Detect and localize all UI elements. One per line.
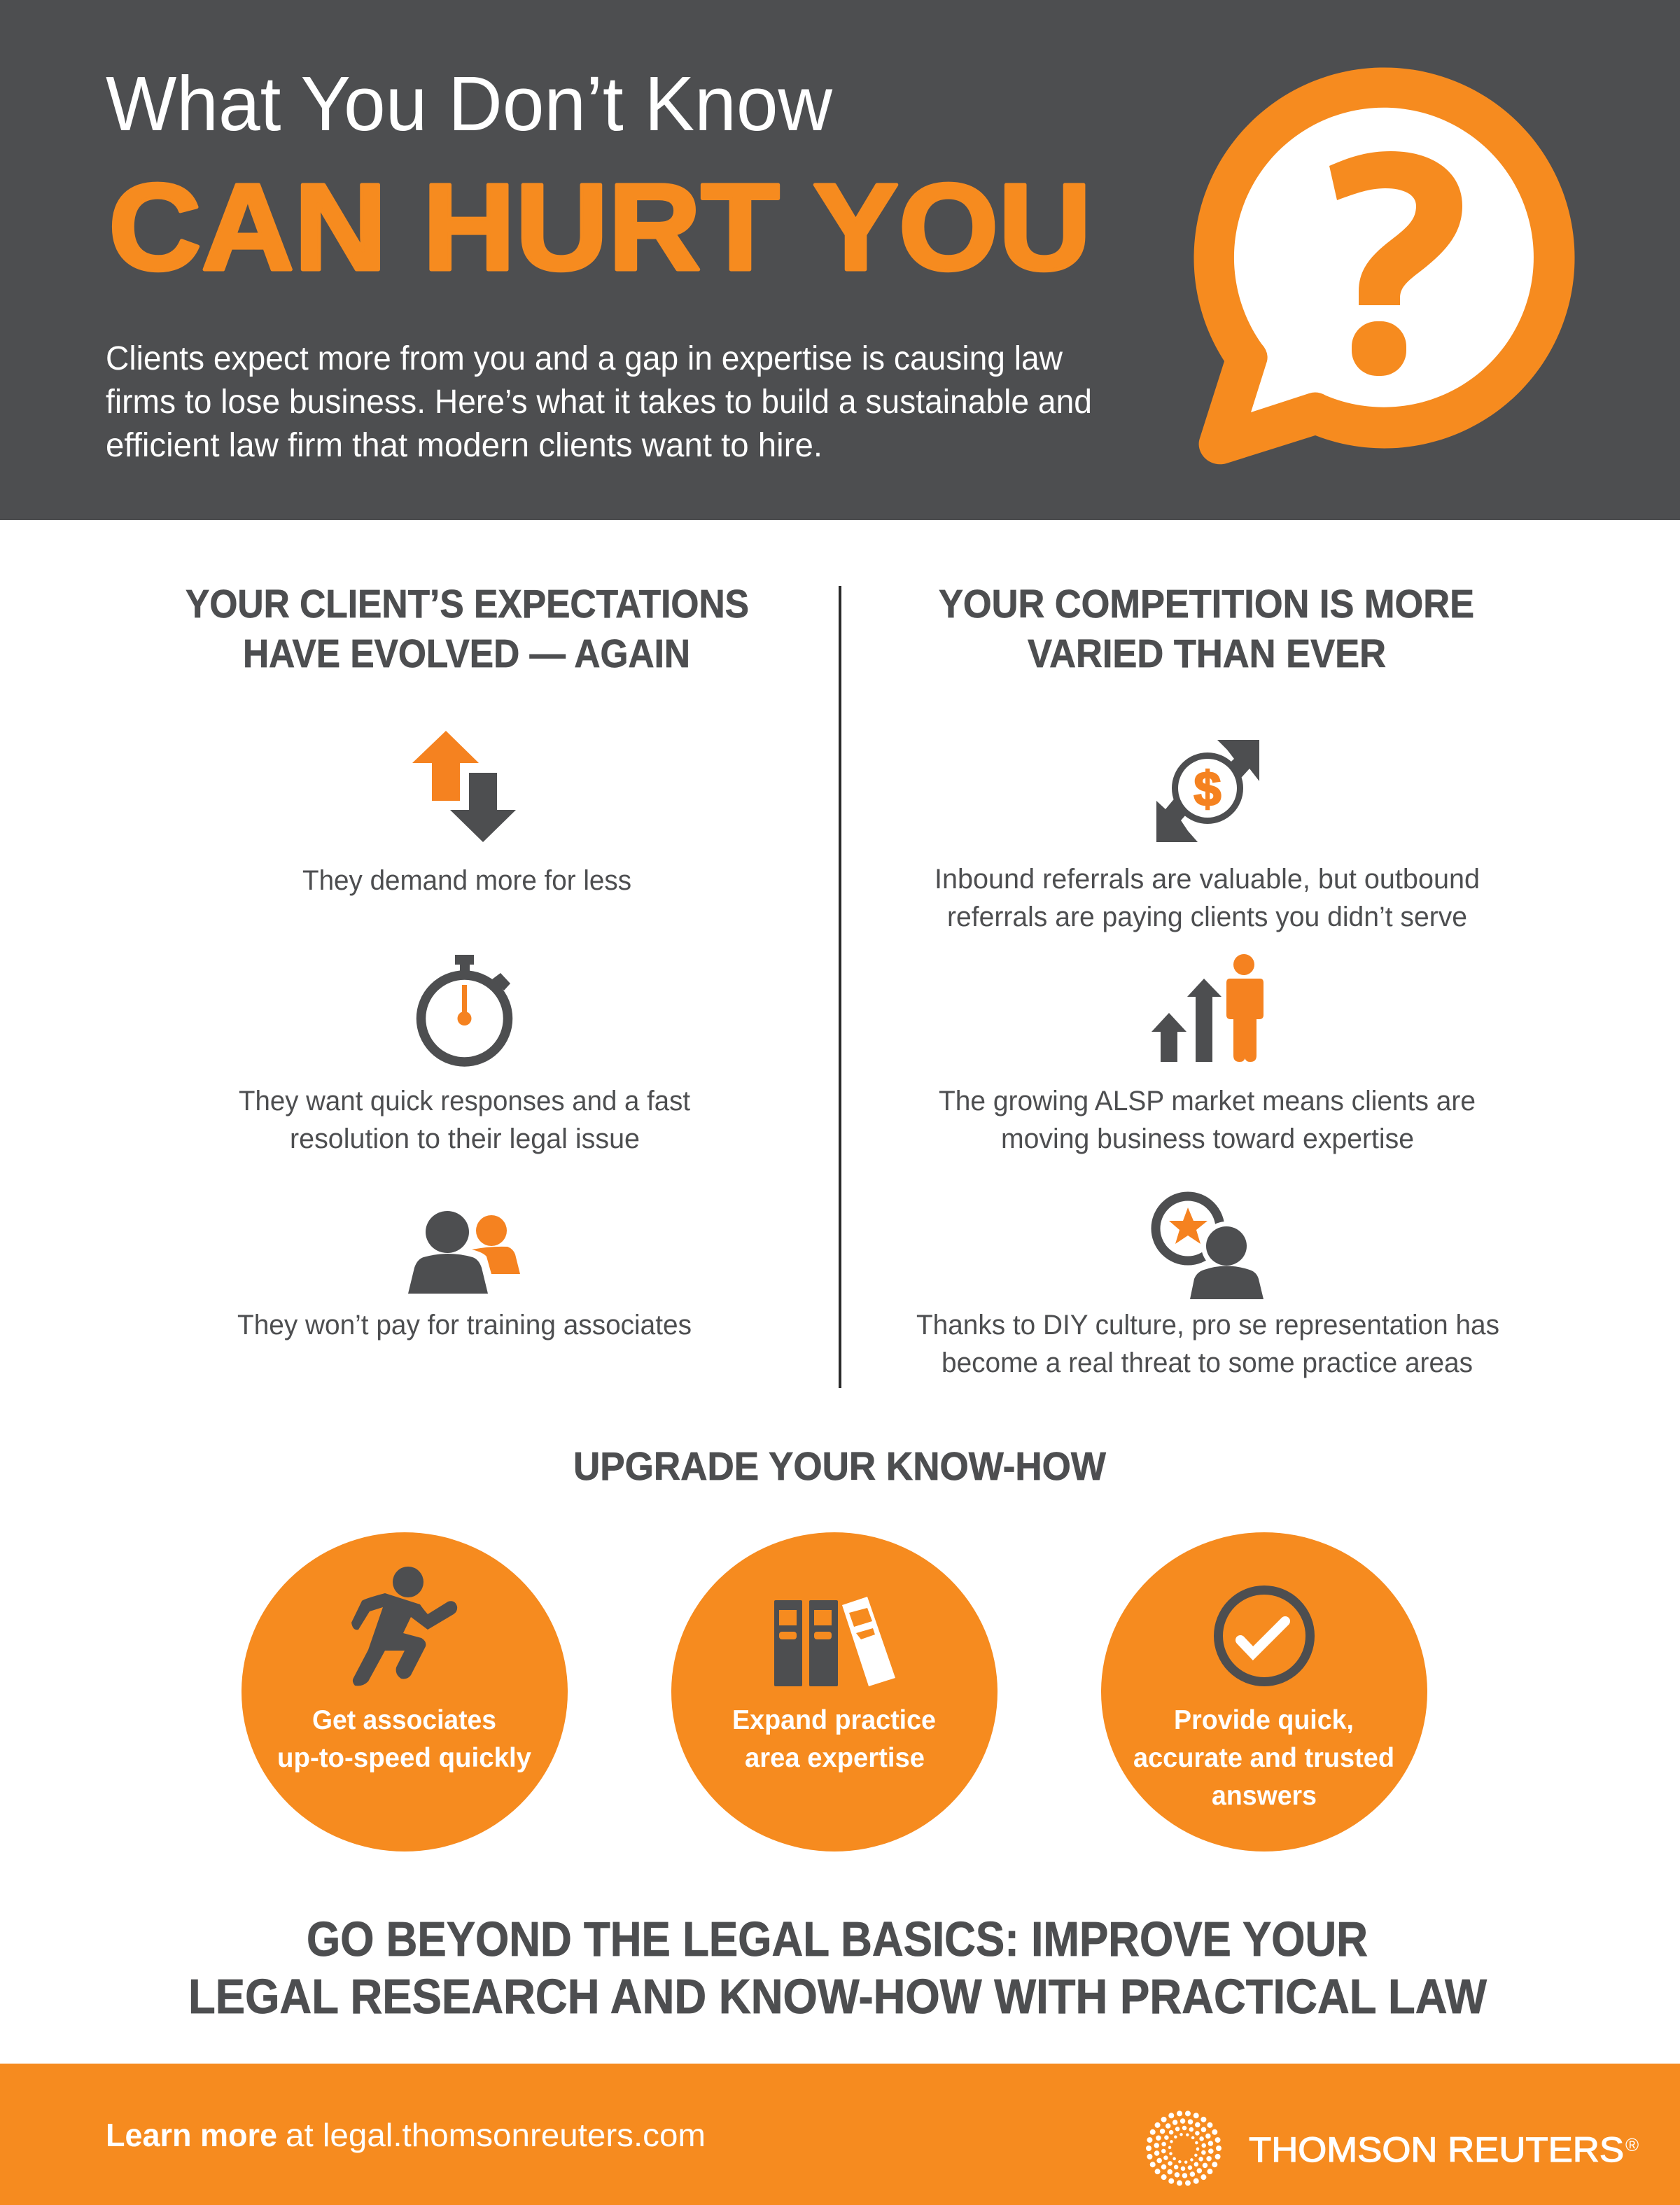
label: Get associates bbox=[312, 1705, 496, 1735]
panel: circle answers bbox=[1101, 1532, 1427, 1851]
text: DIY culture: Thanks to DIY culture, pro se representation has bbox=[916, 1310, 1499, 1340]
icon: runner bbox=[351, 1567, 457, 1686]
text: referrals: Inbound referrals are valuable, but outbound bbox=[934, 864, 1480, 895]
logo wordmark: THOMSON REUTERS bbox=[1249, 2130, 1624, 2169]
icon: growth arrows and person bbox=[1152, 954, 1264, 1062]
left column heading bbox=[186, 582, 749, 676]
icon: star and person bbox=[1156, 1196, 1264, 1299]
closing statement: LEGAL RESEARCH AND KNOW-HOW WITH PRACTICAL LAW bbox=[188, 1969, 1487, 2024]
icon: Thomson Reuters dot logo bbox=[1149, 2113, 1219, 2183]
text: more for less: They demand more for less bbox=[302, 865, 631, 896]
label bbox=[732, 1705, 936, 1773]
text: ALSP market: moving business toward expertise bbox=[1001, 1124, 1414, 1154]
icon: two people bbox=[408, 1211, 520, 1294]
panel: dark header bbox=[0, 0, 1680, 520]
left column heading: HAVE EVOLVED — AGAIN bbox=[243, 631, 690, 676]
call to action: at legal.thomsonreuters.com bbox=[286, 2117, 706, 2153]
text: ALSP market bbox=[939, 1086, 1476, 1154]
label: Provide quick, bbox=[1174, 1705, 1354, 1735]
right column heading bbox=[939, 582, 1474, 676]
label: accurate and trusted bbox=[1133, 1743, 1394, 1773]
label bbox=[277, 1705, 531, 1773]
text: training associates: They won’t pay for training associates bbox=[237, 1310, 692, 1340]
icon: books bbox=[774, 1597, 895, 1686]
icon: up and down arrows bbox=[412, 731, 516, 842]
title line 2: CAN HURT YOU bbox=[108, 159, 1091, 296]
intro paragraph: Clients expect more from you and a gap in expertise is causing law bbox=[106, 340, 1063, 377]
text: referrals: referrals are paying clients you didn’t serve bbox=[947, 902, 1467, 932]
text: quick responses: They want quick responses and a fast bbox=[239, 1086, 690, 1116]
intro paragraph bbox=[106, 340, 1092, 464]
icon: stopwatch bbox=[421, 955, 510, 1062]
label bbox=[1133, 1705, 1394, 1811]
panel: circle expertise bbox=[671, 1532, 997, 1851]
icon: dollar with outward arrows bbox=[1156, 740, 1259, 842]
panel: circle associates bbox=[241, 1532, 568, 1851]
icon: question speech bubble bbox=[1194, 67, 1575, 464]
right column heading: VARIED THAN EVER bbox=[1028, 631, 1386, 676]
text: DIY culture: become a real threat to some practice areas bbox=[941, 1348, 1473, 1378]
text: quick responses bbox=[239, 1086, 690, 1154]
text: referrals bbox=[934, 864, 1480, 932]
logo wordmark: ® bbox=[1625, 2134, 1639, 2155]
text: DIY culture bbox=[916, 1310, 1499, 1378]
text: quick responses: resolution to their legal issue bbox=[290, 1124, 640, 1154]
panel: orange footer bbox=[0, 2064, 1680, 2205]
closing statement: GO BEYOND THE LEGAL BASICS: IMPROVE YOUR bbox=[307, 1912, 1368, 1966]
intro paragraph: firms to lose business. Here’s what it takes to build a sustainable and bbox=[106, 384, 1092, 421]
heading: upgrade: UPGRADE YOUR KNOW-HOW bbox=[573, 1444, 1106, 1489]
title line 1: What You Don’t Know bbox=[106, 61, 833, 147]
text: ALSP market: The growing ALSP market means clients are bbox=[939, 1086, 1476, 1116]
label: up-to-speed quickly bbox=[277, 1743, 531, 1773]
icon: dollar with outward arrows: $ bbox=[1194, 762, 1221, 816]
icon: check mark bbox=[1218, 1590, 1310, 1681]
label: answers bbox=[1212, 1781, 1317, 1811]
label: Expand practice bbox=[732, 1705, 936, 1735]
closing statement bbox=[188, 1912, 1487, 2024]
call to action: Learn more bbox=[106, 2117, 277, 2153]
right column heading: YOUR COMPETITION IS MORE bbox=[939, 582, 1474, 626]
intro paragraph: efficient law firm that modern clients want to hire. bbox=[106, 427, 822, 464]
call to action bbox=[106, 2117, 706, 2153]
left column heading: YOUR CLIENT’S EXPECTATIONS bbox=[186, 582, 749, 626]
label: area expertise bbox=[745, 1743, 925, 1773]
